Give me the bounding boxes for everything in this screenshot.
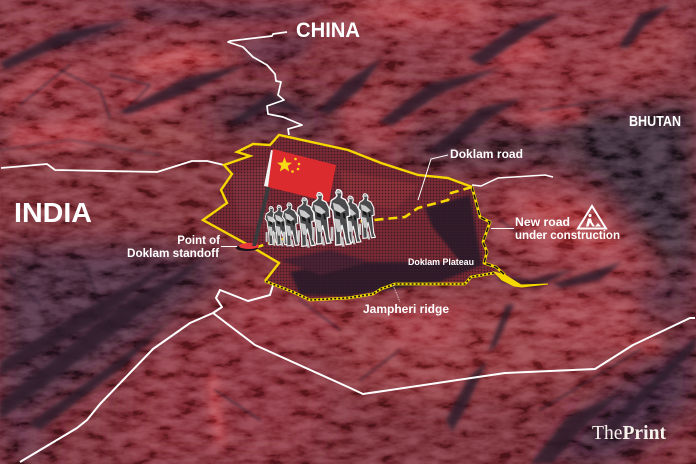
flag pole [252,180,272,246]
white border line: Bhutan road [472,175,553,186]
callout: point of Doklam standoff: Doklam standoff [127,248,219,260]
yellow boundary [203,135,548,287]
road under construction: dashed line [472,187,505,275]
Chinese flag [252,149,336,246]
callout: Jampheri ridge: Jampheri ridge [363,304,449,316]
callout: new road under construction [491,215,620,242]
white border line: southeastern boundary [213,313,695,394]
callout: point of Doklam standoff [127,235,237,260]
label: INDIA: INDIA [14,197,92,228]
label: Doklam Plateau: Doklam Plateau [408,257,474,267]
callout: Jampheri ridge [363,285,449,316]
icon: road work sign [578,206,606,228]
callout: Doklam road: Doklam road [450,149,523,161]
soldiers [265,190,375,248]
white border line: India [1,161,224,172]
white border line: China [228,32,302,135]
logo: ThePrint: ThePrint [592,422,666,444]
plateau: Doklam area [203,135,496,300]
label: CHINA: CHINA [296,19,360,42]
label: BHUTAN: BHUTAN [629,114,681,130]
callout: new road under construction: New road [515,215,570,229]
Jampheri ridge: dashed line [265,273,494,300]
callout: point of Doklam standoff: Point of [177,235,220,247]
flag cloth [268,149,336,202]
flag stars [277,157,300,173]
callout: Doklam road [418,149,523,200]
callout: new road under construction: under construction [515,228,620,242]
Doklam road: dashed yellow [257,187,472,247]
white border line: southern boundary [20,285,273,462]
marker: point of standoff [236,243,259,251]
